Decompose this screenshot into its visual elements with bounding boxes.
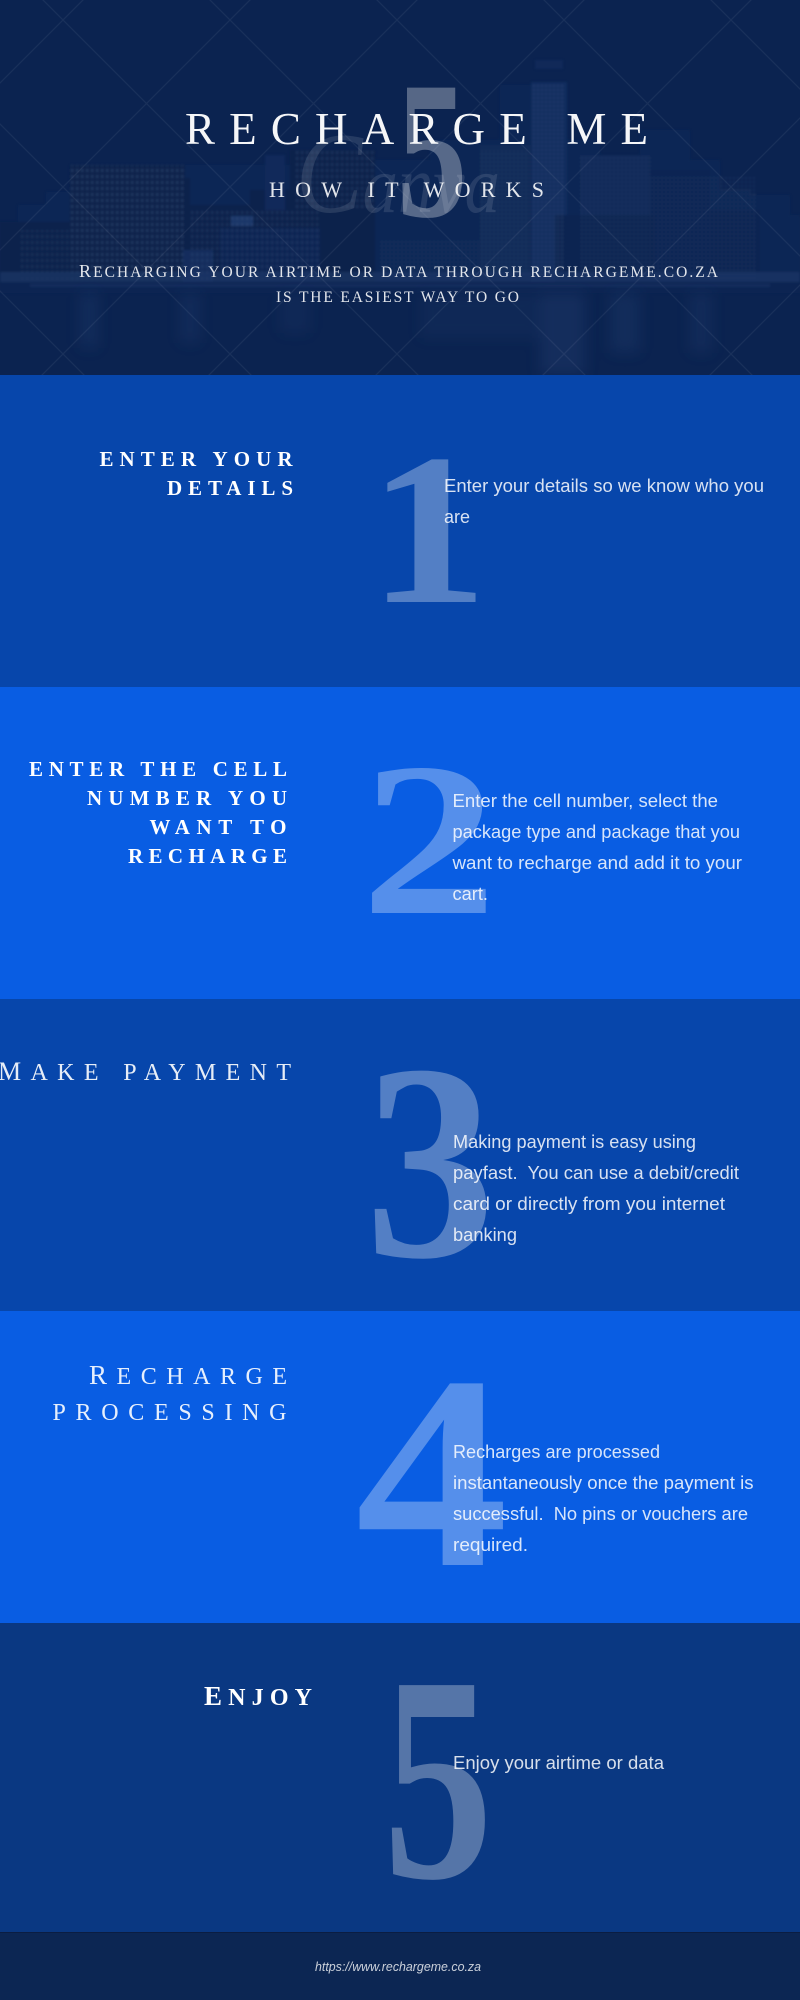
step 2 description: cart. xyxy=(452,883,488,904)
diamond lattice lines xyxy=(0,0,800,375)
panel: step 1 xyxy=(0,375,800,687)
panel: step 2 xyxy=(0,687,800,999)
numeral 1: 1 xyxy=(368,411,488,649)
panel: footer xyxy=(0,1932,800,2000)
step 3 description: payfast. You can use a debit/credit xyxy=(453,1162,739,1183)
intro text: RECHARGING YOUR AIRTIME OR DATA THROUGH RECHARGEME.CO.ZA xyxy=(79,261,719,281)
step 1 heading: ENTER YOUR xyxy=(100,447,293,471)
panel: step 4 xyxy=(0,1311,800,1626)
numeral 3: 3 xyxy=(365,1007,495,1317)
step 5 description: Enjoy your airtime or data xyxy=(453,1752,665,1773)
panel: step 5 xyxy=(0,1617,800,1941)
numeral 2: 2 xyxy=(361,718,497,961)
step 2 heading: RECHARGE xyxy=(128,844,287,868)
intro text xyxy=(79,261,719,306)
step 5 heading: E NJOY xyxy=(204,1681,312,1711)
panel: step 3 xyxy=(0,999,800,1317)
step 2 heading: WANT TO xyxy=(150,815,286,839)
step 1 description xyxy=(444,475,764,527)
step 2 description: package type and package that you xyxy=(452,821,740,842)
step 1 description: Enter your details so we know who you xyxy=(444,475,764,496)
step 2 heading: NUMBER YOU xyxy=(87,786,287,810)
step 3 description xyxy=(453,1131,739,1245)
large faded numeral 5: 5 xyxy=(397,42,467,258)
step 4 heading: PROCESSING xyxy=(52,1400,286,1426)
step 4 heading: R ECHARGE xyxy=(89,1360,287,1390)
step 4 description: successful. No pins or vouchers are xyxy=(453,1503,748,1524)
step 2 description xyxy=(451,790,742,904)
watermark: Canva xyxy=(296,110,500,238)
step 2 heading: ENTER THE CELL xyxy=(29,757,287,781)
step 3 description: Making payment is easy using xyxy=(453,1131,696,1152)
panel: header xyxy=(0,0,800,375)
step 3 heading: M AKE PAYMENT xyxy=(0,1057,291,1086)
step 1 description: are xyxy=(444,506,470,527)
step 4 heading xyxy=(52,1360,287,1426)
step 4 description: instantaneously once the payment is xyxy=(453,1472,754,1493)
step 3 description: card or directly from you internet xyxy=(453,1193,725,1214)
step 1 heading xyxy=(100,447,293,500)
step 4 description xyxy=(453,1441,754,1555)
step 4 description: required. xyxy=(453,1534,528,1555)
website link: https://www.rechargeme.co.za xyxy=(315,1959,481,1974)
step 4 description: Recharges are processed xyxy=(453,1441,660,1462)
step 2 description: Enter the cell number, select the xyxy=(452,790,718,811)
numeral 4: 4 xyxy=(355,1320,509,1626)
step 2 description: want to recharge and add it to your xyxy=(451,852,742,873)
city skyline photo xyxy=(0,60,800,375)
step 1 heading: DETAILS xyxy=(167,476,293,500)
step 2 heading xyxy=(29,757,287,868)
title: RECHARGE ME xyxy=(185,104,648,154)
intro text: IS THE EASIEST WAY TO GO xyxy=(276,289,519,306)
subtitle: HOW IT WORKS xyxy=(269,177,544,202)
numeral 5: 5 xyxy=(383,1617,493,1941)
step 3 description: banking xyxy=(453,1224,517,1245)
